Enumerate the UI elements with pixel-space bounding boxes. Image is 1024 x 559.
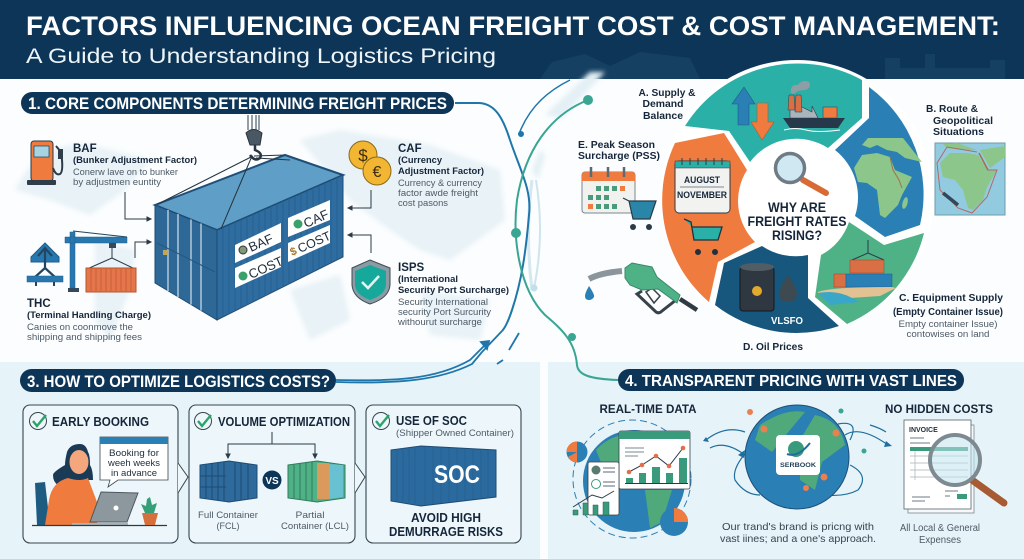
arrow: ISPS to container bbox=[348, 233, 371, 253]
text: local and general expenses: Expenses bbox=[919, 535, 961, 546]
badge: VS: VS bbox=[265, 476, 279, 487]
text: THC: Canies on coonmove the bbox=[27, 322, 133, 332]
crane hook bbox=[246, 115, 262, 159]
label E: Surcharge (PSS) bbox=[578, 150, 660, 162]
icon: coins bbox=[349, 141, 391, 185]
panel: use of SOC bbox=[366, 405, 521, 543]
icon: shield bbox=[352, 260, 390, 304]
connector: green line to section 4 bbox=[511, 95, 618, 380]
text: BAF bbox=[73, 143, 197, 187]
container label: CAF bbox=[288, 200, 331, 237]
text: THC: shipping and shipping fees bbox=[27, 332, 143, 342]
arrow: BAF to container bbox=[125, 192, 151, 221]
icon: calendar and cart bbox=[582, 167, 656, 230]
callout: booking speech bubble bbox=[100, 437, 168, 487]
heading: no hidden costs: NO HIDDEN COSTS bbox=[885, 402, 993, 416]
icon: coins: € bbox=[373, 164, 382, 181]
label A: A. Supply & bbox=[638, 87, 696, 99]
text: ISPS: Security Port Surcharge) bbox=[398, 285, 509, 296]
illustration: hanging container bbox=[155, 115, 343, 320]
connector: section 3 lines with arrow bbox=[336, 331, 519, 382]
title: FACTORS INFLUENCING OCEAN FREIGHT COST & COST MANAGEMENT: bbox=[26, 11, 1000, 41]
segment C: equipment bbox=[815, 222, 924, 324]
arrow: CAF to container bbox=[348, 190, 371, 210]
text: BAF: BAF bbox=[73, 143, 97, 155]
segment E: peak season bbox=[662, 133, 755, 302]
text: THC: THC bbox=[27, 298, 51, 310]
label C bbox=[893, 292, 1003, 339]
text: CAF: Currency & currency bbox=[398, 178, 483, 188]
label C: contowises on land bbox=[906, 329, 990, 339]
text: brand approach bbox=[720, 521, 876, 545]
heading: volume optimization: VOLUME OPTIMIZATION bbox=[218, 415, 350, 429]
container label: COST 2 bbox=[288, 225, 333, 262]
icon: FCL container bbox=[200, 461, 257, 502]
label B: Geopolitical bbox=[933, 115, 993, 127]
text: CAF: factor awde freight bbox=[398, 188, 479, 198]
text: BAF: (Bunker Adjustment Factor) bbox=[73, 155, 197, 166]
arrows: split to FCL and LCL bbox=[226, 432, 317, 458]
logo card: SERBOOK bbox=[780, 462, 816, 469]
pie icons bbox=[566, 442, 688, 536]
icon: check bbox=[372, 412, 390, 430]
illustration: invoice and magnifier: INVOICE bbox=[909, 427, 938, 434]
label E: E. Peak Season bbox=[578, 139, 655, 151]
header banner bbox=[0, 0, 1024, 79]
text: ISPS: withourut surcharge bbox=[397, 317, 482, 327]
text: CAF: cost pasons bbox=[398, 198, 449, 208]
text: FCL: (FCL) bbox=[216, 521, 240, 532]
panel: section 4 background bbox=[548, 362, 1024, 559]
text: brand approach: vast iines; and a one's approach. bbox=[720, 533, 876, 545]
heading: section 1: 1. CORE COMPONENTS DETERMINING FREIGHT PRICES bbox=[28, 95, 447, 113]
container label: BAF bbox=[235, 223, 281, 263]
heading: use of SOC: USE OF SOC bbox=[396, 414, 467, 428]
segment D: oil prices: VLSFO bbox=[771, 316, 803, 327]
panel: volume optimization bbox=[189, 405, 365, 543]
segment E: peak season: AUGUST bbox=[684, 175, 720, 185]
text: ISPS: ISPS bbox=[398, 262, 425, 274]
callout: booking speech bubble: Booking for bbox=[109, 448, 159, 459]
label C: Empty container Issue) bbox=[898, 319, 998, 329]
label C: (Empty Container Issue) bbox=[893, 306, 1003, 318]
segment B: route and geopolitics bbox=[835, 87, 924, 237]
text: CAF bbox=[398, 143, 484, 208]
logo card bbox=[776, 435, 820, 475]
center question: RISING? bbox=[772, 228, 822, 243]
segment D: oil prices bbox=[715, 246, 839, 333]
icon: magnifying glass bbox=[776, 154, 826, 193]
dashboard chart bbox=[619, 431, 690, 489]
label B bbox=[926, 103, 993, 138]
segment A: supply and demand bbox=[685, 63, 862, 162]
icon: check bbox=[194, 412, 212, 430]
label D: D. Oil Prices bbox=[743, 341, 803, 353]
heading: section 3: 3. HOW TO OPTIMIZE LOGISTICS COSTS? bbox=[27, 373, 330, 391]
text: BAF: by adjustmen euntity bbox=[73, 177, 162, 187]
label A bbox=[638, 87, 696, 122]
container label: COST: COST bbox=[246, 253, 285, 282]
container label: BAF: BAF bbox=[246, 231, 275, 255]
icon: SOC container: SOC bbox=[434, 461, 480, 489]
heading: use of SOC: (Shipper Owned Container) bbox=[396, 428, 514, 438]
text: CAF: CAF bbox=[398, 143, 422, 155]
subtitle: A Guide to Understanding Logistics Pricing bbox=[26, 45, 496, 68]
icon: port cranes and container bbox=[27, 231, 136, 292]
inset map: Africa route bbox=[935, 143, 1005, 215]
label A: Balance bbox=[643, 110, 683, 122]
label C: C. Equipment Supply bbox=[899, 292, 1003, 304]
text: CAF: (Currency bbox=[398, 155, 443, 166]
arrow: THC to container bbox=[135, 240, 151, 258]
text: ISPS: (International bbox=[398, 274, 458, 285]
container label: COST 2: COST bbox=[296, 229, 333, 256]
center question bbox=[748, 200, 846, 243]
chart: freight rate cycle bbox=[660, 60, 934, 334]
heading: early booking: EARLY BOOKING bbox=[52, 415, 149, 429]
container label: COST bbox=[235, 248, 285, 288]
text: local and general expenses: All Local & General bbox=[900, 523, 980, 534]
text: ISPS bbox=[397, 262, 509, 327]
icon: SOC container bbox=[391, 446, 496, 506]
text: LCL: Container (LCL) bbox=[281, 521, 349, 532]
text: CAF: Adjustment Factor) bbox=[398, 166, 484, 177]
text: local and general expenses bbox=[900, 523, 980, 546]
label E bbox=[578, 139, 660, 162]
text: demurrage risk: DEMURRAGE RISKS bbox=[389, 524, 503, 539]
text: brand approach: Our trand's brand is pricng with bbox=[722, 521, 874, 533]
segment E: peak season: NOVEMBER bbox=[677, 190, 727, 200]
label B: B. Route & bbox=[926, 103, 978, 115]
text: ISPS: security Port Surcurity bbox=[398, 307, 492, 317]
icon: fuel pump bbox=[27, 141, 63, 185]
center question: WHY ARE bbox=[768, 200, 826, 215]
icon: coins: $ bbox=[358, 146, 368, 165]
illustration: woman at laptop bbox=[32, 444, 167, 526]
callout: booking speech bubble: in advance bbox=[111, 468, 157, 479]
text: LCL bbox=[281, 510, 349, 532]
panel: section 3 background bbox=[0, 362, 540, 559]
text: THC bbox=[27, 298, 151, 342]
container label: COST 2: $ bbox=[288, 245, 299, 259]
container label: CAF: CAF bbox=[301, 206, 331, 231]
heading: real-time data: REAL-TIME DATA bbox=[600, 402, 697, 416]
badge: VS bbox=[262, 470, 282, 490]
text: ISPS: Security International bbox=[398, 297, 488, 307]
report sheet bbox=[573, 462, 619, 515]
illustration: real-time data globe and dashboard bbox=[566, 420, 691, 538]
icon: fuel nozzle bbox=[585, 263, 697, 313]
text: FCL bbox=[198, 510, 258, 532]
illustration: central globe with logo bbox=[703, 405, 892, 509]
illustration: invoice and magnifier bbox=[904, 420, 1004, 513]
text: demurrage risk bbox=[389, 510, 503, 539]
text: FCL: Full Container bbox=[198, 510, 258, 521]
panel: early booking bbox=[23, 405, 188, 543]
callout: booking speech bubble: weeh weeks bbox=[107, 458, 160, 469]
label B: Situations bbox=[933, 126, 984, 138]
heading: section 4: 4. TRANSPARENT PRICING WITH VAST LINES bbox=[625, 373, 957, 390]
text: demurrage risk: AVOID HIGH bbox=[411, 510, 481, 525]
connector: short blue arc bbox=[518, 80, 570, 137]
label A: Demand bbox=[642, 98, 684, 110]
center question: FREIGHT RATES bbox=[748, 214, 846, 229]
text: THC: (Terminal Handling Charge) bbox=[27, 310, 151, 321]
text: LCL: Partial bbox=[296, 510, 324, 521]
text: BAF: Conerw lave on to bunker bbox=[73, 167, 178, 177]
connector: section 1 blue line bbox=[455, 103, 529, 331]
heading: use of SOC bbox=[396, 414, 514, 438]
icon: LCL container bbox=[288, 461, 345, 502]
icon: check bbox=[30, 412, 46, 430]
